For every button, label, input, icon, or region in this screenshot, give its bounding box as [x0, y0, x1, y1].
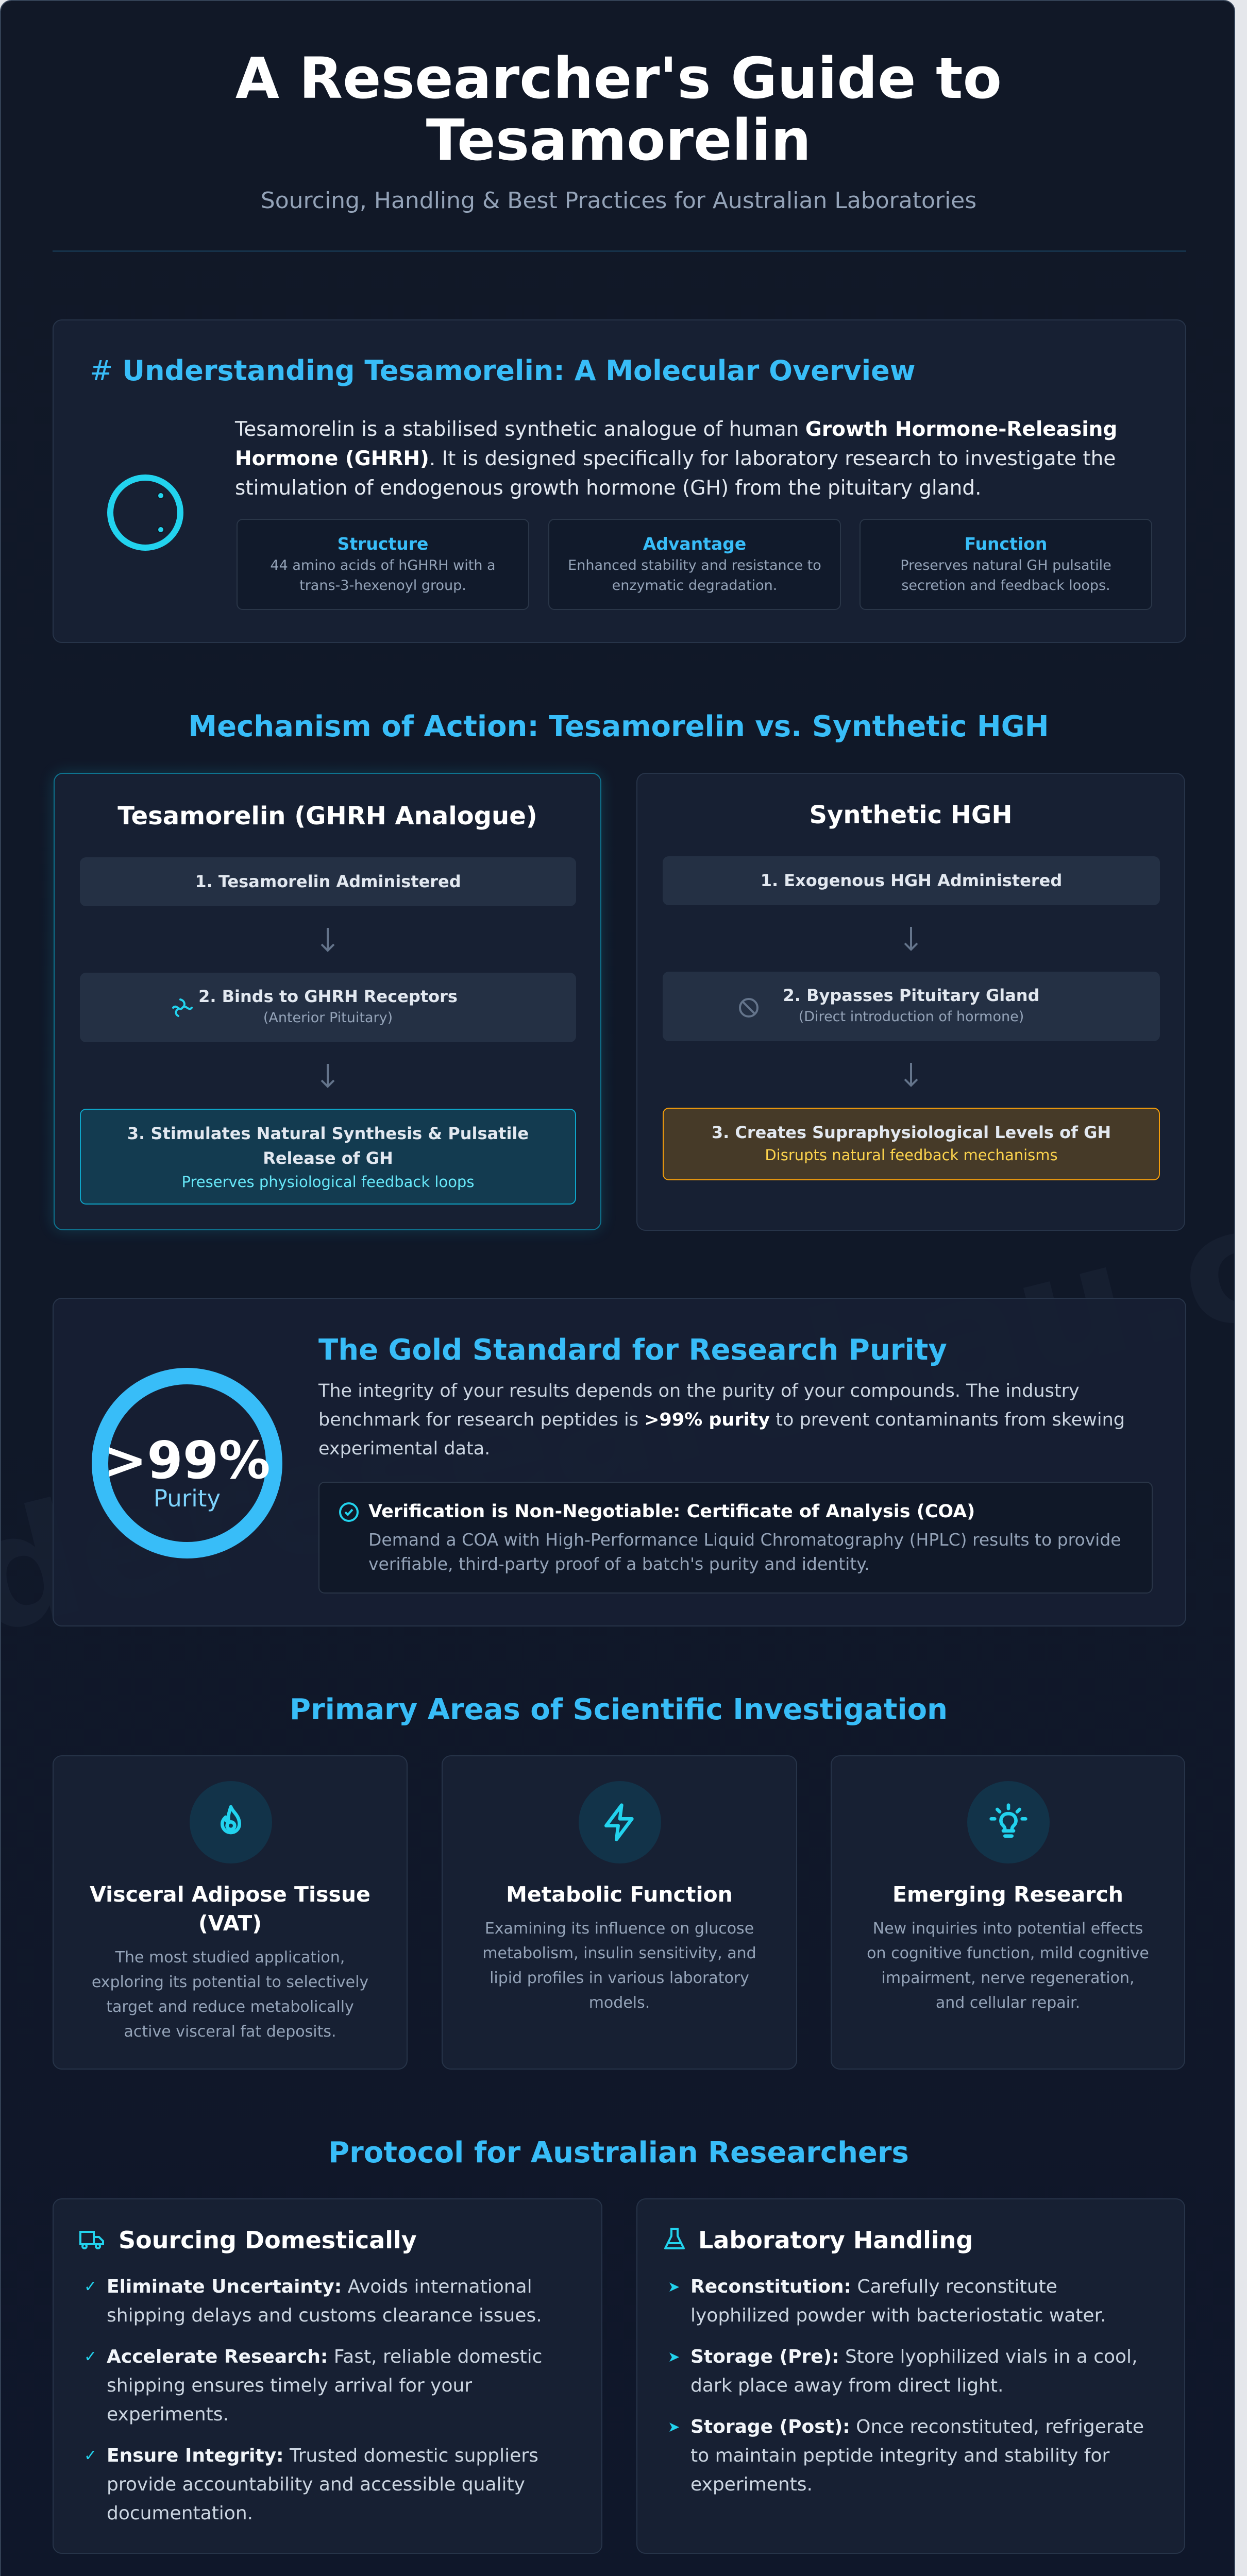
step 3 highlighted: Release of GH [263, 1148, 393, 1168]
intro text: Tesamorelin is a stabilised synthetic analogue of human Growth Hormone-Releasing Hormone (GHRH). It is designed specifically for laboratory research to investigate the stimulation of endogenous growth hormone (GH) from the pituitary gland. [235, 418, 1117, 500]
box: advantage [548, 519, 841, 610]
card: VAT: (VAT) [198, 1911, 262, 1936]
purity ring: Purity [154, 1485, 221, 1512]
list item 3 [668, 2416, 1144, 2495]
paragraph: benchmark for research peptides is >99% purity to prevent contaminants from skewing [318, 1410, 1125, 1430]
title: A Researcher's Guide to [235, 45, 1002, 111]
step 2: 2. Bypasses Pituitary Gland [783, 986, 1039, 1005]
card: metabolic [442, 1755, 797, 2070]
icon: molecule ring [107, 474, 183, 551]
box: function: secretion and feedback loops. [901, 578, 1110, 594]
paragraph: experimental data. [318, 1438, 490, 1459]
list item 3: experiments. [690, 2474, 813, 2495]
card: VAT: The most studied application, [115, 1948, 345, 1967]
card: VAT: Visceral Adipose Tissue [90, 1882, 370, 1907]
step 1 [663, 856, 1160, 905]
icon: blocked [739, 998, 759, 1018]
step 2: (Direct introduction of hormone) [799, 1009, 1024, 1025]
step 3 highlighted [80, 1109, 576, 1205]
card: VAT: target and reduce metabolically [106, 1998, 354, 2016]
panel title: Tesamorelin (GHRH Analogue) [117, 802, 537, 831]
box: advantage: Advantage [643, 534, 746, 554]
heading: primary areas: Primary Areas of Scientific Investigation [290, 1693, 948, 1726]
step 2: (Anterior Pituitary) [263, 1010, 393, 1026]
card: VAT: active visceral fat deposits. [124, 2023, 336, 2041]
step 3 warning: 3. Creates Supraphysiological Levels of GH [712, 1123, 1111, 1142]
heading: mechanism: Mechanism of Action: Tesamorelin vs. Synthetic HGH [188, 710, 1049, 743]
step 3 highlighted: Preserves physiological feedback loops [182, 1173, 474, 1191]
card: emerging: Emerging Research [892, 1882, 1123, 1907]
panel title with flask icon: Laboratory Handling [698, 2226, 973, 2254]
box: structure: Structure [338, 534, 428, 554]
list item 3: Ensure Integrity: Trusted domestic suppliers [107, 2445, 538, 2466]
title: Tesamorelin [426, 107, 811, 173]
list item 3: documentation. [107, 2503, 253, 2524]
step 3 warning [663, 1108, 1160, 1180]
card: metabolic: Metabolic Function [506, 1882, 733, 1907]
list item 1: shipping delays and customs clearance issues. [107, 2305, 542, 2326]
step 2: 2. Binds to GHRH Receptors [198, 987, 458, 1006]
panel: handling [636, 2198, 1185, 2554]
step 3 warning: Disrupts natural feedback mechanisms [765, 1146, 1058, 1164]
icon: receptor [172, 998, 193, 1017]
card: emerging: impairment, nerve regeneration, [881, 1969, 1135, 1987]
card: metabolic: models. [589, 1994, 650, 2012]
callout: COA: Verification is Non-Negotiable: Certificate of Analysis (COA) [368, 1501, 975, 1522]
panel: sourcing: ✓ [84, 2447, 97, 2465]
box: function: Preserves natural GH pulsatile [900, 557, 1111, 573]
card: metabolic: lipid profiles in various laboratory [490, 1969, 749, 1987]
box: structure [237, 519, 529, 610]
card: emerging: and cellular repair. [936, 1994, 1080, 2012]
list item 2: shipping ensures timely arrival for your [107, 2375, 472, 2396]
list item 2 [84, 2346, 542, 2425]
arrow [321, 1064, 335, 1088]
list item 2 [668, 2346, 1138, 2396]
panel title: Synthetic HGH [809, 801, 1012, 829]
panel: synthetic hgh pathway [636, 773, 1185, 1231]
icon: bulb [967, 1781, 1050, 1863]
panel: tesamorelin pathway [54, 773, 601, 1230]
panel: handling: ➤ [668, 2418, 680, 2435]
step 2 [663, 972, 1160, 1041]
list item 2: experiments. [107, 2404, 229, 2425]
arrow [904, 927, 918, 951]
arrow [904, 1063, 918, 1087]
box: advantage: enzymatic degradation. [612, 578, 777, 594]
step 3 highlighted: 3. Stimulates Natural Synthesis & Pulsatile [127, 1124, 529, 1143]
callout: COA: verifiable, third-party proof of a batch's purity and identity. [368, 1554, 870, 1574]
list item 2: Accelerate Research: Fast, reliable domestic [107, 2346, 542, 2367]
purity ring [92, 1368, 282, 1558]
step 1 [80, 857, 576, 906]
list item 1: Reconstitution: Carefully reconstitute [690, 2276, 1057, 2297]
list item 3 [84, 2445, 538, 2524]
list item 1: Eliminate Uncertainty: Avoids international [107, 2276, 532, 2297]
callout: COA: Demand a COA with High-Performance Liquid Chromatography (HPLC) results to provide [368, 1530, 1121, 1550]
icon: bolt [579, 1781, 661, 1863]
box: function [860, 519, 1152, 610]
box: function: Function [965, 534, 1047, 554]
step 2 [80, 973, 576, 1042]
card: metabolic: Examining its influence on glucose [485, 1920, 754, 1938]
list item 1 [668, 2276, 1106, 2326]
card: VAT: exploring its potential to selectively [92, 1973, 368, 1991]
list item 3: provide accountability and accessible quality [107, 2474, 525, 2495]
card: emerging [831, 1755, 1185, 2070]
purity ring: >99% [104, 1430, 271, 1490]
icon: flame [190, 1781, 272, 1863]
card: emerging: New inquiries into potential effects [873, 1920, 1143, 1938]
panel: sourcing [53, 2198, 602, 2554]
step 1: 1. Exogenous HGH Administered [761, 871, 1062, 890]
panel: purity [53, 1298, 1186, 1626]
list item 2: dark place away from direct light. [690, 2375, 1003, 2396]
list item 1: lyophilized powder with bacteriostatic water. [690, 2305, 1106, 2326]
panel: molecular overview [53, 319, 1186, 643]
card: VAT [53, 1755, 408, 2070]
icon: check circle [339, 1502, 359, 1522]
step 1: 1. Tesamorelin Administered [195, 872, 461, 891]
panel title with truck icon: Sourcing Domestically [119, 2226, 417, 2254]
list item 3: to maintain peptide integrity and stability for [690, 2445, 1109, 2466]
title [235, 45, 1002, 173]
heading: protocol: Protocol for Australian Researchers [328, 2136, 909, 2170]
list item 3: Storage (Post): Once reconstituted, refrigerate [690, 2416, 1144, 2437]
paragraph: The integrity of your results depends on the purity of your compounds. The industry [318, 1381, 1080, 1401]
panel: sourcing: ✓ [84, 2278, 97, 2296]
card: emerging: on cognitive function, mild cognitive [867, 1944, 1149, 1962]
heading: # Understanding Tesamorelin: A Molecular Overview [90, 354, 916, 387]
panel: handling: ➤ [668, 2348, 680, 2365]
box: structure: 44 amino acids of hGHRH with a [270, 557, 496, 573]
list item 1 [84, 2276, 542, 2326]
heading: The Gold Standard for Research Purity [318, 1333, 947, 1367]
subtitle: Sourcing, Handling & Best Practices for Australian Laboratories [261, 188, 976, 214]
panel: handling: ➤ [668, 2278, 680, 2295]
paragraph [318, 1381, 1125, 1459]
box: structure: trans-3-hexenoyl group. [299, 578, 466, 594]
card: metabolic: metabolism, insulin sensitivity, and [482, 1944, 756, 1962]
callout: COA [318, 1482, 1153, 1594]
list item 2: Storage (Pre): Store lyophilized vials in a cool, [690, 2346, 1138, 2367]
panel: sourcing: ✓ [84, 2348, 97, 2366]
arrow [321, 928, 335, 952]
box: advantage: Enhanced stability and resistance to [568, 557, 821, 573]
